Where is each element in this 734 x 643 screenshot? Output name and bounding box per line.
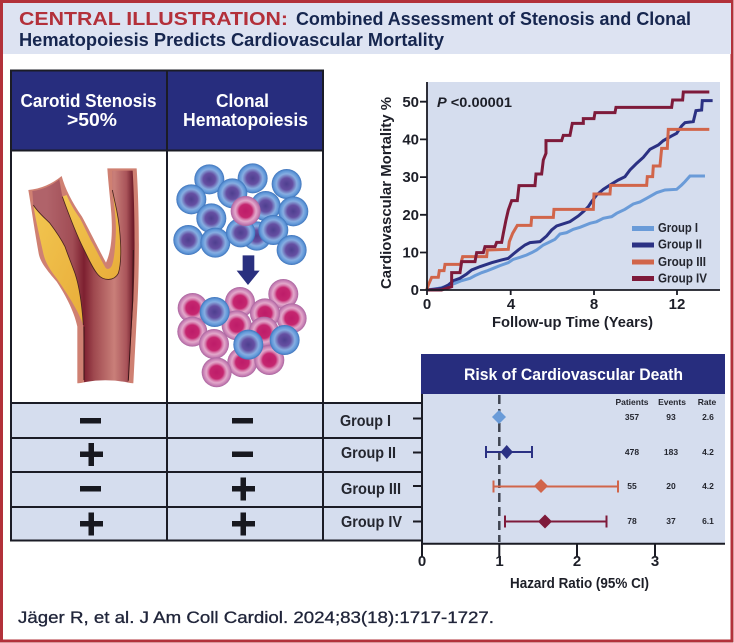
- forest plot background: [422, 394, 725, 543]
- plot background: [427, 82, 720, 290]
- y axis tick labels: 40: [402, 132, 419, 148]
- y axis tick labels: 20: [402, 207, 419, 224]
- data table: patients, events, rate: Patients: [615, 397, 649, 407]
- title: first line: Combined Assessment of Stenosis and Clonal: [296, 9, 691, 29]
- forest plot header: [421, 354, 725, 394]
- forest row: group III: [494, 479, 618, 493]
- curve: group II: [427, 101, 713, 290]
- cells: before clonal expansion: [173, 163, 308, 265]
- data table: patients, events, rate: 93: [666, 412, 676, 422]
- data table: patients, events, rate: 37: [666, 516, 676, 526]
- table header: carotid stenosis: >50%: [67, 109, 117, 130]
- forest x axis tick labels: 2: [573, 553, 581, 570]
- title band: [3, 3, 731, 54]
- cells: after clonal expansion: [177, 279, 307, 387]
- data table: patients, events, rate: 2.6: [702, 412, 714, 422]
- curve: group IV: [427, 92, 709, 290]
- group rows background: [11, 403, 421, 540]
- forest plot header: Risk of Cardiovascular Death: [464, 365, 683, 384]
- forest x axis tick labels: 0: [418, 553, 426, 570]
- survival curves: [427, 92, 713, 290]
- x axis tick labels: 12: [669, 296, 685, 313]
- group labels: Group III: [341, 481, 401, 498]
- curve: group III: [427, 129, 709, 290]
- artery outer wall: [28, 168, 139, 383]
- left plaque: [33, 205, 83, 325]
- data table: patients, events, rate: Events: [658, 397, 686, 407]
- data table: patients, events, rate: 478: [625, 447, 639, 457]
- table header: carotid stenosis: [11, 71, 167, 150]
- y axis tick labels: 50: [402, 94, 419, 111]
- legend: Group II: [658, 238, 702, 252]
- plus and minus indicators: [80, 418, 255, 536]
- panel: risk factor table: [10, 70, 421, 541]
- x axis tick labels: [423, 296, 685, 313]
- x axis tick labels: 4: [507, 296, 516, 313]
- title: red lead-in: CENTRAL ILLUSTRATION:: [19, 9, 288, 29]
- y axis tick labels: 0: [411, 282, 419, 299]
- forest plot axes and row ticks: [413, 394, 725, 557]
- data table: patients, events, rate: 183: [664, 447, 678, 457]
- legend: Group IV: [658, 272, 708, 286]
- legend: Group I: [658, 221, 698, 235]
- y axis title: Cardiovascular Mortality %: [378, 97, 395, 289]
- curve: group I: [427, 176, 705, 290]
- forest x axis title: Hazard Ratio (95% CI): [510, 576, 649, 592]
- forest row: group IV: [505, 514, 606, 528]
- title: second line: Hematopoiesis Predicts Cardiovascular Mortality: [19, 30, 444, 50]
- data table: patients, events, rate: 55: [627, 481, 637, 491]
- group labels: Group I: [340, 413, 391, 430]
- forest x axis tick labels: [418, 553, 659, 570]
- table header: carotid stenosis: Carotid Stenosis: [20, 90, 156, 111]
- crotch plaque: [62, 190, 121, 279]
- bottom cut of vessel: [76, 380, 135, 388]
- forest x axis tick labels: 1: [495, 553, 504, 570]
- y axis tick labels: 30: [402, 169, 419, 186]
- x axis tick labels: 8: [590, 296, 598, 313]
- legend: [632, 221, 708, 286]
- reference line at hazard ratio 1: [498, 395, 501, 542]
- data table: patients, events, rate: 4.2: [702, 481, 714, 491]
- y axis tick labels: 10: [402, 244, 419, 262]
- plaque edge lines: [33, 190, 121, 325]
- icon: down arrow: [237, 255, 260, 285]
- vessel edge lines: [84, 250, 133, 381]
- data table: patients, events, rate: 78: [627, 516, 637, 526]
- table header: clonal hematopoiesis: Clonal: [216, 90, 269, 111]
- chart axes: [420, 82, 720, 295]
- panel: risk of cardiovascular death forest plot: [413, 354, 725, 592]
- illustration: blue and pink clonal cells: [173, 163, 308, 387]
- data table: patients, events, rate: 6.1: [702, 516, 714, 526]
- forest row: group I: [492, 410, 506, 424]
- y axis tick labels: [402, 94, 419, 299]
- legend: Group III: [658, 255, 706, 269]
- table header: clonal hematopoiesis: [167, 71, 323, 150]
- group labels: Group II: [341, 445, 396, 462]
- x axis title: Follow-up Time (Years): [492, 314, 653, 331]
- group labels: [340, 413, 403, 531]
- illustration: carotid artery with plaque: [28, 168, 139, 388]
- data table: patients, events, rate: 20: [666, 481, 676, 491]
- table header: clonal hematopoiesis: Hematopoiesis: [183, 109, 308, 130]
- citation: Jäger R, et al. J Am Coll Cardiol. 2024;83(18):1717-1727.: [18, 609, 494, 627]
- chart: cardiovascular mortality curves: [378, 82, 720, 331]
- forest row: group II: [486, 445, 532, 459]
- data table: patients, events, rate: 4.2: [702, 447, 714, 457]
- p value: P <0.00001: [437, 95, 513, 110]
- table grid lines: [10, 70, 421, 541]
- artery lumen: [32, 171, 135, 382]
- group labels: Group IV: [341, 514, 403, 531]
- data table: patients, events, rate: [615, 397, 716, 526]
- data table: patients, events, rate: Rate: [698, 397, 716, 407]
- data table: patients, events, rate: 357: [625, 412, 639, 422]
- x axis tick labels: 0: [423, 296, 431, 313]
- forest x axis tick labels: 3: [651, 553, 659, 570]
